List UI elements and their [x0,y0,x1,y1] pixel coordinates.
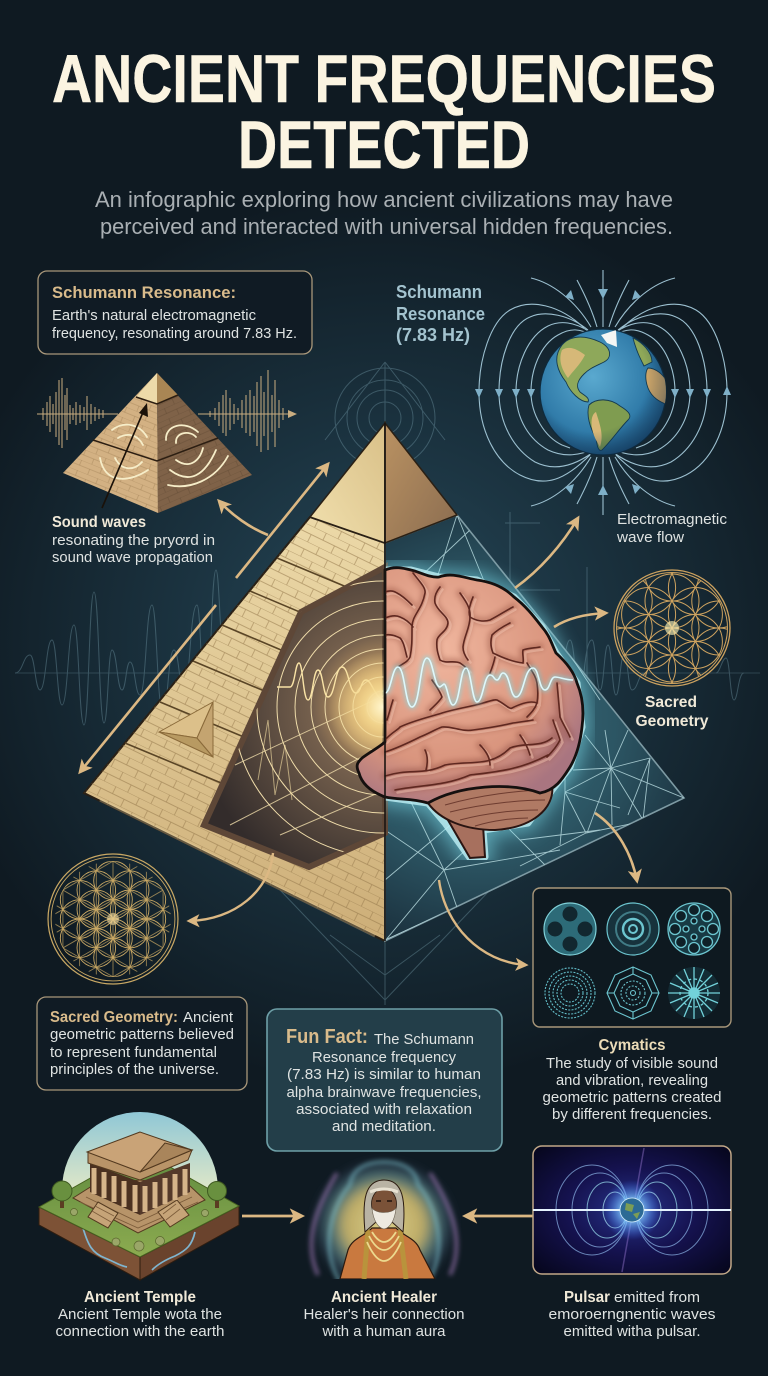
cymatic pattern 1 [544,903,596,955]
pulsar caption [548,1289,716,1340]
pulsar caption: Pulsar [564,1289,610,1306]
eyes [376,1200,392,1202]
panel: fun fact: Fun Fact: [286,1026,368,1048]
pulsar magnetic loops [556,1148,708,1272]
title: DETECTED [238,107,530,183]
trees [52,1181,226,1208]
arrow pulsar to healer [465,1215,533,1217]
panel: Schumann Resonance definition [38,271,312,354]
arrow to sacred geometry right [554,613,606,627]
sound waves label: Sound waves [52,514,146,531]
sacred geometry right label [636,694,709,730]
panel: Sacred Geometry definition [37,997,247,1090]
lower segment of double arrow [80,605,216,772]
cymatics label: The study of visible sound [546,1056,718,1072]
panel: Sacred Geometry definition: Sacred Geometry: [50,1009,178,1026]
ancient healer caption [304,1289,464,1340]
cymatic pattern 3 [668,903,720,955]
arrow to earth [515,518,578,588]
Schumann Resonance label: Resonance [396,304,485,324]
sky dome [62,1112,218,1210]
subtitle: An infographic exploring how ancient civilizations may have [95,187,673,212]
globe [540,329,668,455]
beard [372,1208,396,1229]
sacred geometry right label: Geometry [636,713,709,730]
robe [340,1228,435,1279]
faint blueprint background: waves and triangles [15,362,760,1005]
cymatic pattern 2 [607,903,659,955]
electromagnetic label [616,511,727,546]
pulsar core glow [602,1180,662,1240]
arrow to small pyramid [219,501,268,535]
title [52,41,716,183]
panel: Sacred Geometry definition: geometric patterns believed [50,1027,234,1043]
pyramid cap [310,423,385,543]
icon: sacred geometry flower left [35,845,191,993]
aura [311,1159,457,1291]
ancient temple caption: connection with the earth [56,1324,225,1340]
subtitle [95,187,673,239]
pulsar beam [533,1208,731,1212]
pulsar caption: emitted from [614,1290,700,1306]
ancient healer caption: Ancient Healer [331,1289,437,1306]
sound waves label: sound wave propagation [52,549,213,566]
panel: cymatics patterns [533,888,731,1027]
panel: fun fact: (7.83 Hz) is similar to human [287,1067,481,1083]
sash and necklaces [364,1230,406,1279]
Schumann Resonance label: Schumann [396,282,482,302]
ancient temple illustration [39,1112,239,1280]
brain [357,568,583,858]
brain stem [445,815,485,858]
pulsar caption: emitted witha pulsar. [564,1324,700,1340]
cymatics label [542,1037,722,1123]
cymatic pattern 6 [668,967,720,1019]
panel: Sacred Geometry definition: to represent fundamental [50,1045,217,1061]
panel: fun fact: alpha brainwave frequencies, [286,1085,482,1101]
small pyramid with sound waves [37,370,297,513]
grass top [39,1150,239,1257]
sound wave trace left [37,378,118,448]
sound waves label: resonating the pryơrd in [52,532,215,549]
cymatics label: by different frequencies. [552,1107,712,1123]
panel: fun fact: Resonance frequency [312,1050,457,1066]
icon: sacred geometry flower right [613,569,731,687]
temple roof [88,1150,192,1180]
ancient healer caption: Healer's heir connection [304,1307,464,1323]
cerebral cortex [357,568,583,803]
headband [370,1189,398,1192]
ancient temple caption: Ancient Temple [84,1289,196,1306]
ancient temple caption [56,1289,225,1340]
pulsar caption: emoroerngnentic waves [548,1307,716,1323]
central divider [384,423,386,941]
cymatics label: and vibration, revealing [556,1073,708,1089]
panel: Schumann Resonance definition: Earth's natural electromagnetic [52,308,256,324]
ancient healer caption: with a human aura [321,1324,446,1340]
magnetic field lines [475,270,731,515]
pulsar illustration [533,1146,731,1274]
small pyramid resonance arcs [100,425,228,486]
panel: fun fact: and meditation. [332,1119,436,1135]
earth with magnetic field [475,270,731,515]
Schumann Resonance label [396,282,485,345]
inset triangle relief [159,702,213,757]
panel: fun fact [267,1009,502,1151]
wave arrow tip [288,410,297,418]
temple columns [90,1163,190,1215]
electromagnetic label: wave flow [616,529,684,546]
ancient temple caption: Ancient Temple wota the [58,1307,222,1323]
soil block [39,1207,140,1280]
arrow to cymatics from lower [439,880,526,965]
brain folds [385,573,572,792]
panel: Schumann Resonance definition: frequency, resonating around 7.83 Hz. [52,326,297,342]
brain glow [385,570,582,858]
cymatics label: geometric patterns created [542,1090,722,1106]
underground water [83,1228,195,1270]
face [371,1190,397,1212]
brain wave trace [385,658,573,707]
main pyramid [84,423,684,945]
cavity with sound rings [200,562,388,870]
panel: fun fact: associated with relaxation [296,1102,472,1118]
cymatic pattern 4 [545,968,595,1018]
temple base and steps [73,1180,205,1233]
ancient healer illustration [311,1159,457,1291]
subtitle: perceived and interacted with universal hidden frequencies. [100,214,673,239]
electromagnetic label: Electromagnetic [617,511,727,528]
panel: Schumann Resonance definition: Schumann Resonance: [52,283,236,302]
pyramid right geometric face [385,515,684,941]
arrow to cymatics from right [595,813,637,881]
panel: Sacred Geometry definition: Ancient [183,1010,233,1026]
sound wave trace right [198,370,294,452]
sound waves label [52,514,215,566]
sacred geometry right label: Sacred [645,694,697,711]
pyramid left stone face [84,517,385,941]
cerebellum [428,781,552,830]
cymatics label: Cymatics [598,1037,666,1054]
pulsar earth [620,1198,644,1222]
panel: fun fact: The Schumann [374,1032,474,1048]
pointer arrow [102,410,144,508]
arrow temple to healer [242,1215,302,1217]
Schumann Resonance label: (7.83 Hz) [396,325,470,345]
small pyramid faces [63,373,158,513]
head wrap [364,1180,404,1232]
arrow to sacred geometry left [189,853,273,921]
big double arrow along pyramid edge [236,464,328,578]
panel: Sacred Geometry definition: principles of the universe. [50,1062,219,1078]
shrubs [70,1208,208,1251]
cymatic pattern 5 [607,967,659,1019]
